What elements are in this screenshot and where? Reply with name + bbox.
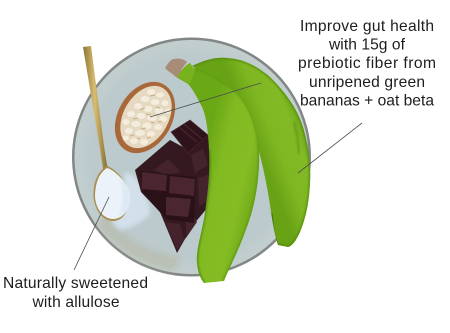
icon: oats in wooden spoon <box>103 71 187 164</box>
icon: dark chocolate <box>135 120 214 253</box>
icon: back banana <box>192 58 310 247</box>
icon: front banana <box>177 63 260 283</box>
text: allulose callout <box>3 275 148 311</box>
plate <box>72 38 311 276</box>
callout line: allulose <box>74 197 109 270</box>
callout line: prebiotic fiber <box>298 123 362 173</box>
text: allulose callout: with allulose <box>32 294 120 311</box>
callout line: oat beta <box>150 83 261 117</box>
text: allulose callout: Naturally sweetened <box>3 275 148 292</box>
icon: banana stem tip <box>165 59 187 79</box>
text: prebiotic fiber callout: with 15g of <box>328 36 406 54</box>
text: prebiotic fiber callout: Improve gut health <box>300 18 434 35</box>
text: prebiotic fiber callout: bananas + oat beta <box>300 92 434 110</box>
icon: spoon with sugar <box>83 46 150 230</box>
text: prebiotic fiber callout <box>298 18 436 110</box>
text: prebiotic fiber callout: unripened green <box>309 74 425 91</box>
text: prebiotic fiber callout: prebiotic fiber from <box>298 55 436 72</box>
